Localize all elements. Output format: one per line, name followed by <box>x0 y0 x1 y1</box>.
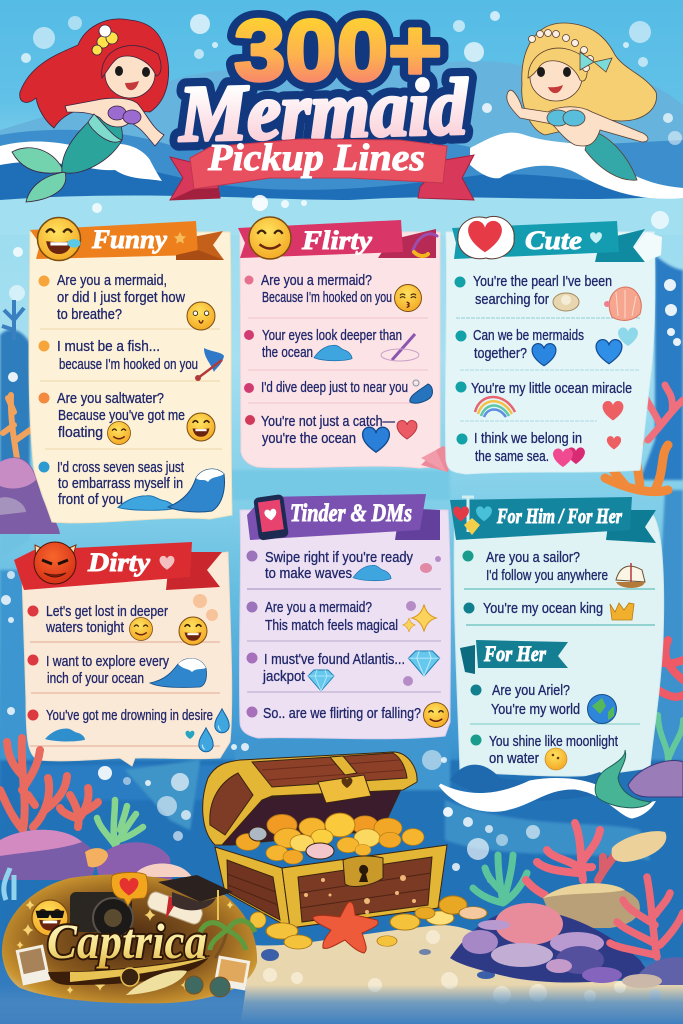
icon: pink hearts <box>553 447 585 467</box>
icon: graduation cap <box>158 875 233 920</box>
purple rock <box>0 830 95 880</box>
icon: heart cloud <box>458 216 514 259</box>
mermaid fin <box>595 750 651 808</box>
for him lines: Are you a sailor? <box>486 550 580 566</box>
left side coral and rocks <box>0 300 60 534</box>
icon: teal heart <box>186 731 194 739</box>
logo blob <box>2 874 257 1003</box>
for her lines: You shine like moonlight <box>489 734 618 750</box>
heading: Dirty <box>87 548 151 577</box>
icon: starfish <box>313 902 378 953</box>
head <box>530 53 582 101</box>
cute lines <box>454 274 640 465</box>
tinder lines: Are you a mermaid? <box>265 600 372 616</box>
icon: blue heart right <box>596 340 622 364</box>
icon: small wave <box>45 728 85 742</box>
left reef <box>0 738 192 900</box>
flirty lines: Because I'm hooked on you <box>262 290 392 306</box>
funny lines: Are you a mermaid, <box>57 273 167 289</box>
icon: lure <box>413 234 437 256</box>
red coral <box>0 738 98 830</box>
right side coral <box>605 382 683 760</box>
dirty lines: inch of your ocean <box>47 671 144 687</box>
chest left side <box>215 847 290 928</box>
icon: camera <box>70 892 133 938</box>
mouth <box>548 85 563 93</box>
icon: photo right <box>214 955 250 991</box>
funny lines: front of you <box>58 492 123 508</box>
heading: Funny <box>91 225 167 254</box>
funny lines: because I'm hooked on you <box>59 357 198 373</box>
sand <box>240 925 683 1024</box>
urchin <box>133 863 192 877</box>
small heart <box>590 232 602 243</box>
icon: wave <box>150 658 207 688</box>
head <box>105 50 155 98</box>
funny lines: Because you've got me <box>58 408 185 424</box>
dirty lines <box>28 604 220 746</box>
dirty lines: waters tonight <box>45 620 124 636</box>
for her heading: For Her <box>483 641 546 666</box>
mouth <box>125 81 139 90</box>
tan rock top <box>612 831 666 862</box>
card <box>29 232 232 523</box>
icon: envelope <box>421 446 452 472</box>
icon: sparkles <box>403 604 436 632</box>
panel: cute <box>445 216 662 474</box>
blonde mermaid <box>507 23 657 180</box>
icon: phone <box>253 494 289 541</box>
body and arms <box>507 90 648 146</box>
for her lines: You're my world <box>491 702 580 718</box>
gold coins <box>236 813 424 864</box>
icon: blue heart left <box>532 344 556 366</box>
icon: pale heart <box>618 327 638 346</box>
background shapes <box>0 255 683 960</box>
emoji kiss <box>394 284 422 312</box>
lid latch <box>318 775 371 803</box>
icon: earth <box>588 694 616 724</box>
icon: crown <box>610 603 634 620</box>
blue bra <box>547 110 585 126</box>
card <box>240 232 440 468</box>
icon: shell <box>604 287 641 320</box>
chest interior <box>222 785 403 845</box>
emoji smirk <box>424 702 448 728</box>
flirty lines: you're the ocean <box>262 431 356 447</box>
bow <box>580 52 612 72</box>
cute lines: Can we be mermaids <box>473 328 584 344</box>
coral right <box>610 877 683 957</box>
ribbon <box>247 494 440 540</box>
tail <box>585 130 637 180</box>
icon: scroll <box>144 890 204 931</box>
card <box>454 508 664 776</box>
panel: flirty <box>238 217 452 472</box>
tinder lines: So.. are we flirting or falling? <box>263 706 421 722</box>
icon: shoe <box>410 380 432 403</box>
panel: funny <box>29 218 232 523</box>
wave foam left <box>0 141 162 181</box>
cute lines: the same sea. <box>475 449 549 465</box>
cute lines: You're my little ocean miracle <box>471 381 632 397</box>
title <box>170 3 474 200</box>
flirty lines <box>244 273 428 447</box>
flirty lines: You're not just a catch— <box>261 414 395 430</box>
for him lines <box>462 550 655 625</box>
tail <box>62 112 122 173</box>
tinder lines <box>246 550 441 722</box>
flirty lines: the ocean <box>262 345 313 361</box>
heading: Flirty <box>301 226 373 255</box>
emoji smile <box>130 618 152 640</box>
funny lines <box>38 273 222 508</box>
green coral <box>97 800 143 845</box>
wood specks <box>304 875 416 914</box>
tinder lines: This match feels magical <box>265 618 398 634</box>
icon: wave <box>353 565 391 581</box>
seaweed <box>473 855 527 903</box>
scale hip <box>88 114 122 142</box>
treasure chest <box>203 752 447 928</box>
funny lines: or did I just forget how <box>57 290 185 306</box>
blonde hair <box>522 23 657 135</box>
icon: water drops <box>199 709 229 752</box>
icon: pen <box>381 334 419 361</box>
flirty lines: Are you a mermaid? <box>261 273 372 289</box>
dirty lines: You've got me drowning in desire <box>46 708 213 724</box>
eyes <box>115 66 150 77</box>
wordmark: Captrica <box>47 913 207 969</box>
chest lid <box>203 752 417 845</box>
card <box>445 232 655 474</box>
tinder lines: Swipe right if you're ready <box>265 550 414 566</box>
lock <box>343 856 383 886</box>
subtitle: Pickup Lines <box>207 137 425 179</box>
title outline: 300+ <box>234 3 442 99</box>
emoji grin <box>179 617 207 645</box>
for her lines: on water <box>489 751 539 767</box>
background waves <box>0 61 683 235</box>
icon: shutter <box>121 968 139 986</box>
purple rocks <box>450 910 650 982</box>
chest front <box>282 845 447 928</box>
purple bra <box>108 106 141 124</box>
emoji devil <box>34 542 76 584</box>
star <box>174 232 186 244</box>
emoji laughing <box>38 218 80 260</box>
ribbon <box>238 220 436 258</box>
heading: Cute <box>525 226 582 255</box>
tinder lines: to make waves <box>265 566 352 582</box>
for him lines: You're my ocean king <box>483 601 603 617</box>
300+: 300+ <box>234 3 442 99</box>
scattered coins <box>250 896 487 949</box>
icon: gem large <box>408 651 440 676</box>
icon: wave <box>314 345 352 361</box>
funny lines: I must be a fish... <box>57 339 160 355</box>
red hair <box>20 19 169 128</box>
dirty lines: Let's get lost in deeper <box>46 604 168 620</box>
blue coral left <box>4 868 14 900</box>
title outline <box>176 3 469 159</box>
funny lines: to embarrass myself in <box>58 476 183 492</box>
body and arms <box>65 98 164 146</box>
funny lines: floating <box>58 425 103 441</box>
for her ribbon <box>460 640 568 674</box>
fin <box>12 148 66 202</box>
cute lines: searching for <box>475 292 549 308</box>
funny lines: Are you saltwater? <box>57 391 164 407</box>
pink shell <box>306 843 334 859</box>
icon: photo left <box>16 944 50 986</box>
blots <box>193 594 218 621</box>
icon: rainbow <box>475 397 515 417</box>
glitter <box>16 900 234 994</box>
panel: tinder and dms <box>239 494 450 739</box>
ribbon <box>14 542 222 590</box>
title outline: Mermaid <box>176 63 469 159</box>
sand shadow spots <box>261 949 495 979</box>
emoji grin <box>187 413 215 441</box>
funny lines: to breathe? <box>57 307 122 323</box>
dark rocks far right <box>638 957 683 985</box>
blots <box>403 556 441 686</box>
pearl crown <box>528 30 594 72</box>
ribbon <box>450 497 656 543</box>
flirty lines: I'd dive deep just to near you <box>261 380 408 396</box>
icon: small red heart <box>607 436 621 449</box>
ribbon <box>452 221 645 262</box>
icon: sunglasses <box>185 976 230 997</box>
icon: pearl <box>553 293 579 311</box>
icon: hook <box>195 348 224 381</box>
heading: For Him / For Her <box>496 504 623 528</box>
tan rock <box>543 884 640 928</box>
wave foam right <box>470 133 683 199</box>
icon: heart bubble <box>111 872 148 906</box>
icon: small wave <box>118 496 174 510</box>
icon: palm <box>200 921 255 958</box>
icon: gem small <box>308 670 334 691</box>
fringe <box>102 46 161 78</box>
bottom water <box>0 985 683 1024</box>
icon: feather <box>126 970 187 995</box>
ribbon <box>30 221 224 260</box>
icon: red heart <box>603 401 623 420</box>
cute lines: together? <box>474 346 527 362</box>
icon: boat <box>616 563 645 588</box>
dirty lines: I want to explore every <box>46 654 170 670</box>
panel: dirty <box>14 542 232 766</box>
silver stone <box>249 827 267 841</box>
lower right wave and fin <box>440 750 653 817</box>
card <box>22 552 232 766</box>
swoosh <box>48 955 210 985</box>
Mermaid: Mermaid <box>176 63 469 159</box>
heart <box>160 556 174 570</box>
funny lines: I'd cross seven seas just <box>57 460 184 476</box>
coral red <box>526 823 617 895</box>
flirty lines: Your eyes look deeper than <box>262 328 402 344</box>
brand logo <box>2 872 257 1003</box>
tinder lines: jackpot <box>262 669 305 685</box>
icon: moon <box>545 748 567 770</box>
emoji sunglasses <box>32 900 68 936</box>
heading: Tinder & DMs <box>290 500 412 527</box>
icon: red heart <box>397 420 417 439</box>
red haired mermaid <box>12 19 169 202</box>
panel: for him and for her <box>450 497 664 776</box>
orange blob <box>85 848 108 867</box>
card <box>239 510 450 739</box>
cute lines: I think we belong in <box>474 431 582 447</box>
pale rock <box>622 974 662 988</box>
icon: blue heart <box>363 427 389 452</box>
sand specks <box>263 930 661 1004</box>
for him lines: I'd follow you anywhere <box>486 568 608 584</box>
ribbon banner <box>170 137 474 200</box>
fringe <box>528 48 587 81</box>
for her lines: Are you Ariel? <box>492 683 570 699</box>
cute lines: You're the pearl I've been <box>473 274 612 290</box>
emoji blush <box>249 217 291 259</box>
icon: big wave <box>168 469 224 512</box>
gem badge <box>634 232 662 262</box>
right reef <box>450 823 683 988</box>
flower <box>92 32 118 55</box>
icon: anchor hearts <box>453 497 492 535</box>
emoji wow <box>187 302 215 330</box>
tinder lines: I must've found Atlantis... <box>264 652 405 668</box>
eyes <box>537 67 571 77</box>
for her lines <box>470 683 640 767</box>
rock lower right <box>628 761 683 797</box>
swoosh gold <box>70 957 210 982</box>
emoji smile <box>108 422 130 444</box>
